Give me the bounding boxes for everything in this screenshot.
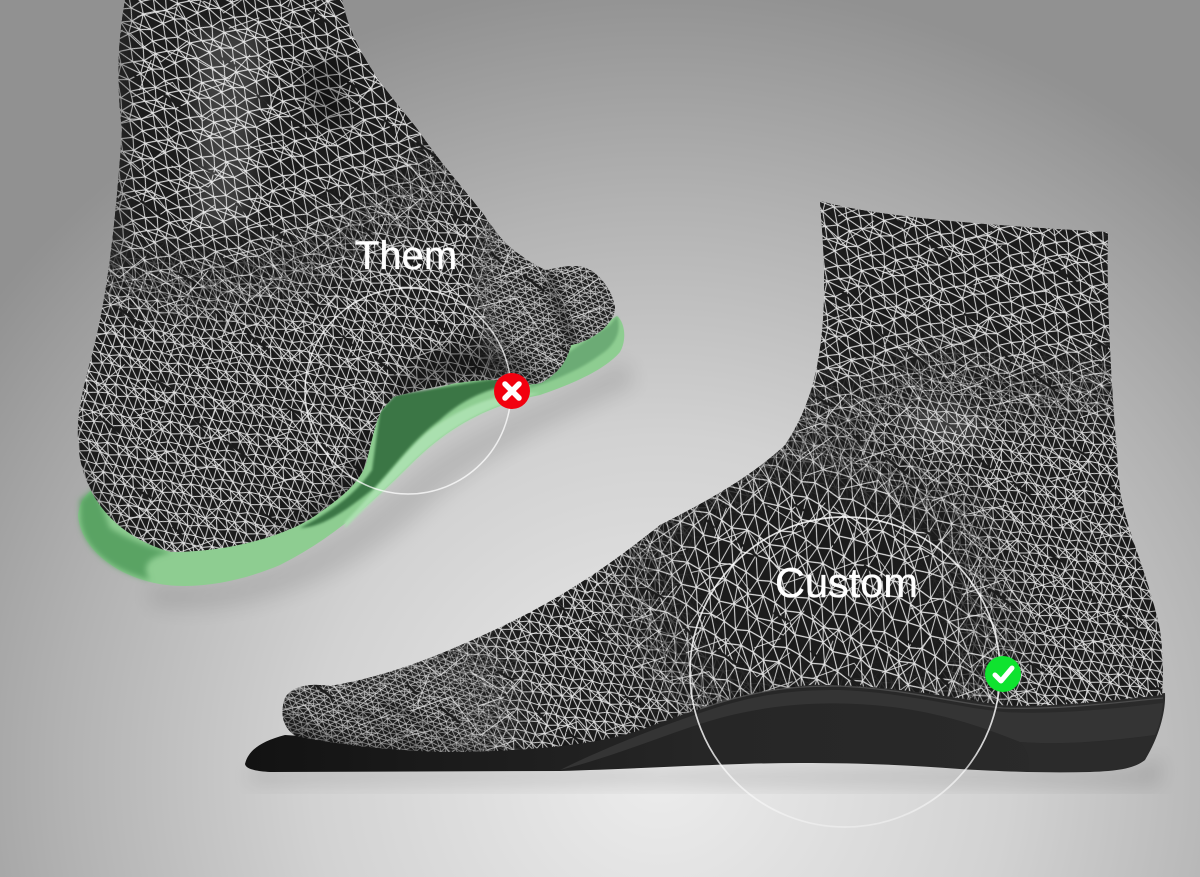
shadow under Custom insole — [250, 755, 1160, 785]
insole toe surface — [530, 316, 619, 388]
label: Them: Them — [355, 234, 457, 278]
foot mesh: Them — [78, 0, 615, 552]
green insole: Them — [78, 316, 624, 586]
icon: green check — [985, 656, 1021, 692]
foot mesh: Custom — [282, 201, 1163, 752]
icon: red cross — [494, 373, 530, 409]
heel rim line on Custom insole — [700, 686, 1163, 709]
label: Custom: Custom — [775, 559, 918, 606]
foot shading: Custom — [282, 288, 1163, 764]
foot shading: Them — [30, 0, 575, 600]
black insole: Custom — [245, 681, 1165, 772]
highlight circle: Custom — [690, 517, 1000, 827]
highlight circle: Them — [305, 288, 511, 494]
insole arch highlight — [345, 393, 540, 528]
insole heel facet — [1020, 735, 1155, 772]
insole inner surface — [300, 378, 500, 528]
insole upper band — [560, 690, 1163, 770]
shadow under Them insole — [150, 360, 635, 608]
insole heel lip — [80, 488, 172, 580]
